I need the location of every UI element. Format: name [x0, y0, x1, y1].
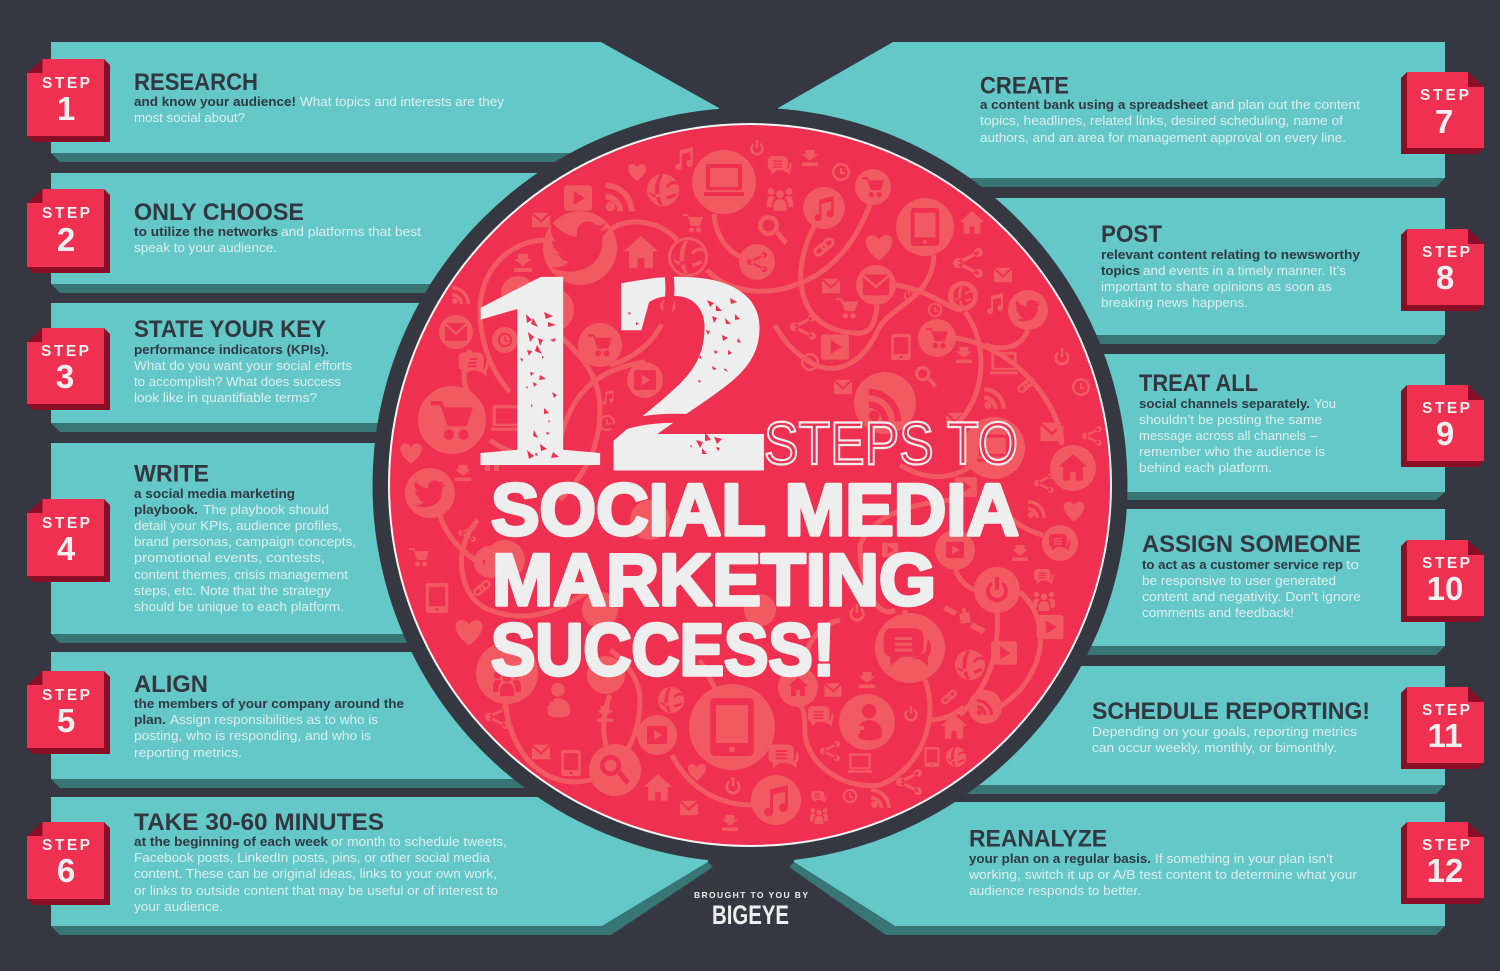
panel: step 9 treat all — [1095, 354, 1484, 500]
badge: step 6 — [27, 822, 110, 905]
body: create — [980, 97, 1360, 145]
body: take 30-60 minutes: or month to schedule tweets, — [331, 834, 507, 849]
body: reanalyze: audience responds to better. — [969, 883, 1141, 898]
body: state your key: What do you want your social efforts — [134, 358, 353, 373]
body: post: breaking news happens. — [1101, 295, 1248, 310]
body: write: promotional events, contests, — [134, 550, 325, 565]
badge: step 4: 4 — [57, 530, 76, 567]
heading: treat all: TREAT ALL — [1139, 370, 1258, 397]
body: only choose: and platforms that best — [281, 224, 421, 239]
body: post: topics — [1101, 263, 1140, 278]
body: take 30-60 minutes: at the beginning of each week — [134, 834, 329, 849]
body: write: The playbook should — [203, 502, 329, 517]
body: create: authors, and an area for management approval on every line. — [980, 130, 1346, 145]
badge: step 3: 3 — [56, 358, 74, 395]
body: create: and plan out the content — [1211, 97, 1360, 112]
badge: step 2: 2 — [57, 221, 75, 258]
title numeral 12: 2 — [602, 214, 776, 530]
body: take 30-60 minutes — [134, 834, 507, 914]
heading: research: RESEARCH — [134, 69, 258, 96]
body: treat all: behind each platform. — [1139, 460, 1272, 475]
heading: state your key: STATE YOUR KEY — [134, 316, 326, 343]
body: assign someone: be responsive to user generated — [1142, 573, 1336, 588]
badge: step 5: STEP — [42, 687, 90, 704]
badge: step 12 — [1401, 822, 1484, 904]
body: schedule reporting — [1092, 724, 1358, 755]
title: social media marketing success: SUCCESS! — [491, 610, 835, 691]
badge: step 5: 5 — [57, 702, 75, 739]
heading: only choose: ONLY CHOOSE — [134, 199, 304, 226]
distressed speckles on numeral — [520, 298, 741, 459]
badge: step 7: 7 — [1435, 103, 1453, 140]
body: assign someone: to act as a customer service rep — [1142, 557, 1343, 572]
body: take 30-60 minutes: your audience. — [134, 899, 223, 914]
badge: step 3: STEP — [41, 343, 89, 360]
title: social media marketing success — [491, 470, 1019, 691]
badge: step 10: 10 — [1427, 570, 1463, 607]
body: treat all: message across all channels – — [1139, 428, 1318, 443]
credit: brought to you by bigeye: BROUGHT TO YOU BY — [694, 890, 808, 900]
badge: step 2 — [27, 189, 110, 273]
panel: step 7 create — [778, 42, 1484, 187]
body: research: most social about? — [134, 110, 245, 125]
body: take 30-60 minutes: content. These can be original ideas, links to your own work, — [134, 866, 497, 881]
body: state your key: performance indicators (KPIs). — [134, 342, 329, 357]
body: align: posting, who is responding, and who is — [134, 728, 372, 743]
badge: step 9: 9 — [1436, 415, 1454, 452]
body: reanalyze: If something in your plan isn’t — [1155, 851, 1333, 866]
panel: step 10 assign someone — [1080, 509, 1484, 655]
body: treat all: remember who the audience is — [1139, 444, 1326, 459]
badge: step 8: 8 — [1436, 259, 1454, 296]
body: assign someone — [1142, 557, 1361, 620]
badge: step 1: STEP — [42, 75, 90, 92]
badge: step 10: STEP — [1422, 555, 1470, 572]
body: reanalyze: working, switch it up or A/B test content to determine what your — [968, 867, 1358, 882]
panel: step 12 reanalyze — [789, 802, 1484, 935]
badge: step 8 — [1401, 229, 1484, 311]
heading: assign someone: ASSIGN SOMEONE — [1142, 531, 1361, 558]
body: only choose: speak to your audience. — [134, 240, 277, 255]
body: treat all: social channels separately. — [1139, 396, 1310, 411]
panel: step 3 state your key — [27, 303, 440, 432]
badge: step 9 — [1401, 385, 1484, 467]
badge: step 7: STEP — [1420, 87, 1469, 104]
top cluster — [692, 150, 756, 214]
body: post — [1101, 247, 1361, 310]
body: post: important to share opinions as soon as — [1101, 279, 1333, 294]
body: assign someone: comments and feedback! — [1142, 605, 1294, 620]
body: write: brand personas, campaign concepts, — [134, 534, 356, 549]
badge: step 1: 1 — [57, 90, 75, 127]
body: treat all — [1139, 396, 1336, 475]
heading: reanalyze: REANALYZE — [969, 826, 1107, 852]
body: schedule reporting: Depending on your goals, reporting metrics — [1092, 724, 1358, 739]
body: write: content themes, crisis management — [134, 567, 348, 582]
body: write: playbook. — [134, 502, 198, 517]
body: assign someone: to — [1346, 557, 1359, 572]
body: align: plan. — [134, 712, 166, 727]
badge: step 1 — [27, 59, 110, 142]
body: post: and events in a timely manner. It’s — [1143, 263, 1347, 278]
badge: step 11: 11 — [1428, 717, 1462, 754]
heading: create: CREATE — [980, 72, 1069, 100]
middle cluster — [418, 386, 486, 454]
panel: step 1 research — [27, 42, 719, 162]
badge: step 4: STEP — [42, 515, 90, 532]
body: research — [134, 94, 505, 125]
body: treat all: shouldn’t be posting the same — [1139, 412, 1322, 427]
heading: post: POST — [1101, 221, 1162, 248]
body: research: What topics and interests are they — [300, 94, 505, 109]
body: align: Assign responsibilities as to who is — [170, 712, 379, 727]
body: write — [134, 486, 356, 614]
title: social media marketing success: SOCIAL MEDIA — [491, 470, 1019, 551]
panel: step 6 take 30-60 minutes — [27, 797, 713, 935]
panel: step 4 write — [27, 443, 420, 643]
body: align: reporting metrics. — [134, 745, 242, 760]
heading: write: WRITE — [134, 460, 209, 488]
heading: align: ALIGN — [134, 671, 208, 698]
title: steps to: STEPS TO — [764, 410, 1018, 477]
badge: step 6: STEP — [42, 837, 90, 854]
body: only choose: to utilize the networks — [134, 224, 278, 239]
badge: step 11: STEP — [1422, 702, 1470, 719]
heading: take 30-60 minutes: TAKE 30-60 MINUTES — [134, 809, 384, 836]
panel: step 8 post — [980, 198, 1484, 344]
body: state your key — [134, 342, 353, 405]
title numeral 12: 1 — [454, 212, 617, 527]
body: schedule reporting: can occur weekly, monthly, or bimonthly. — [1092, 740, 1337, 755]
gaps breaking the numeral 2 — [612, 268, 775, 430]
body: state your key: to accomplish? What does success — [134, 374, 341, 389]
body: create: a content bank using a spreadsheet — [980, 97, 1209, 112]
badge: step 3 — [27, 328, 110, 410]
body: take 30-60 minutes: Facebook posts, LinkedIn posts, pins, or other social media — [134, 850, 491, 865]
badge: step 4 — [27, 499, 110, 582]
body: write: should be unique to each platform. — [134, 599, 344, 614]
badge: step 2: STEP — [42, 205, 90, 222]
body: treat all: You — [1314, 396, 1336, 411]
body: reanalyze: your plan on a regular basis. — [969, 851, 1151, 866]
panel: step 11 schedule reporting — [950, 666, 1484, 794]
body: reanalyze — [968, 851, 1358, 898]
central circle — [372, 108, 1128, 862]
badge: step 8: STEP — [1422, 244, 1470, 261]
badge: step 12: STEP — [1422, 837, 1470, 854]
badge: step 9: STEP — [1422, 400, 1470, 417]
badge: step 7 — [1401, 72, 1484, 154]
credit: brought to you by bigeye — [694, 890, 808, 930]
title: social media marketing success: MARKETING — [492, 540, 936, 621]
body: assign someone: content and negativity. Don’t ignore — [1142, 589, 1361, 604]
bottom cluster — [689, 684, 775, 770]
body: create: topics, headlines, related links, desired scheduling, name of — [980, 113, 1343, 128]
title numeral 12 — [454, 212, 776, 530]
body: write: steps, etc. Note that the strategy — [134, 583, 332, 598]
social media icon pattern — [400, 140, 1102, 831]
badge: step 6: 6 — [57, 852, 75, 889]
badge: step 11 — [1401, 687, 1484, 769]
badge: step 12: 12 — [1427, 852, 1463, 889]
body: align — [134, 696, 404, 760]
body: align: the members of your company around the — [134, 696, 404, 711]
body: post: relevant content relating to newsworthy — [1101, 247, 1361, 262]
body: write: detail your KPIs, audience profiles, — [134, 518, 342, 533]
credit: brought to you by bigeye: BIGEYE — [712, 900, 789, 930]
panel: step 2 only choose — [27, 173, 560, 293]
body: state your key: look like in quantifiable terms? — [134, 390, 317, 405]
badge: step 10 — [1401, 540, 1484, 622]
badge: step 5 — [27, 671, 110, 754]
body: take 30-60 minutes: or links to outside content that may be useful or of interest to — [134, 883, 498, 898]
body: only choose — [134, 224, 421, 255]
panel: step 5 align — [27, 652, 545, 788]
body: write: a social media marketing — [134, 486, 295, 501]
heading: schedule reporting: SCHEDULE REPORTING! — [1092, 698, 1370, 725]
body: research: and know your audience! — [134, 94, 296, 109]
